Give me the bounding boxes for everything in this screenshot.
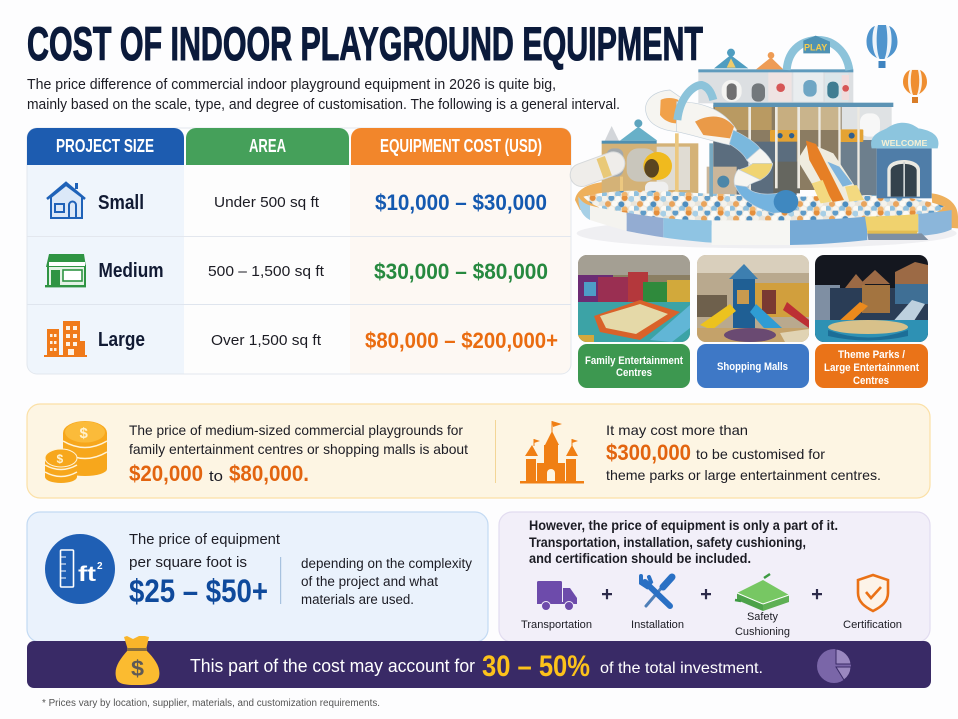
callout: custom price: to be customised for [696,446,825,462]
back rim [575,182,958,228]
text: price per square foot: $25 – $50+ [129,573,268,609]
intro text: mainly based on the scale, type, and degree of customisation. The following is a general interval. [27,97,620,113]
table header: area [186,128,349,165]
icon: shield [858,575,888,611]
intro text: The price difference of commercial indoor playground equipment in 2026 is quite big, [27,77,556,93]
callout: medium price: The price of medium-sized commercial playgrounds for [129,422,463,438]
upper deck [698,69,893,107]
text: banner: This part of the cost may account for [190,656,475,676]
callout: medium price [129,422,468,486]
text: additional costs: Transportation, installation, safety cushioning, [529,535,806,550]
illustration: playground [575,36,958,248]
row: small [47,183,547,218]
plus signs [602,589,822,599]
text: banner: of the total investment. [600,660,763,677]
ball pit [583,191,945,228]
row: small: Under 500 sq ft [214,194,320,211]
welcome house: WELCOME [881,138,928,148]
foam ring [578,197,952,245]
photo: shopping mall [697,255,809,342]
table header: equipment cost: EQUIPMENT COST (USD) [380,136,542,156]
icon: coins: $ [80,425,88,442]
icon: orange balloon [903,69,927,103]
callout: custom price: theme parks or large entertainment centres. [606,467,881,483]
row: large: Over 1,500 sq ft [211,332,322,349]
callout: medium price: to [209,469,223,485]
callout: medium price: $80,000. [229,461,309,486]
spiral slide [646,85,798,213]
panel: price table [27,128,571,374]
panel: price callouts [27,404,930,498]
row: medium: $30,000 – $80,000 [374,259,548,284]
PLAY arch: PLAY [804,42,828,52]
icon: pie chart [817,649,851,683]
icon labels: Safety [747,611,778,623]
row: small: $10,000 – $30,000 [375,190,547,215]
icon labels: Installation [631,619,684,631]
table header: equipment cost [351,128,571,165]
text: complexity note [301,556,472,607]
icon: safety cushion [735,574,789,611]
photo: family centre [578,255,690,342]
icon: coins [45,421,107,483]
text: price per square foot: The price of equipment [129,531,281,548]
banner: share of total investment [27,636,931,688]
icon labels: Transportation [521,619,592,631]
roof domes [714,49,783,69]
text: additional costs [529,518,838,566]
icon: money bag [116,636,159,685]
icon: money bag: $ [131,656,144,681]
footnote: * Prices vary by location, supplier, materials, and customization requirements. [42,698,380,709]
panel: theme parks [815,255,928,388]
callout: custom price: It may cost more than [606,422,748,438]
row: large: $80,000 – $200,000+ [365,328,558,353]
text: additional costs: and certification should be included. [529,551,751,566]
panel: family entertainment centres [578,255,690,388]
floor shadow [577,218,957,248]
yellow capsule [643,152,672,180]
row: medium [45,254,548,287]
label: family centres: Family Entertainment [585,355,683,367]
icon: ft squared: ft [78,563,96,586]
intro text [27,77,620,113]
table header: project size: PROJECT SIZE [56,136,154,156]
panel: price per square foot [27,512,488,642]
icon labels: Certification [843,619,902,631]
icon: castle [520,421,584,484]
row: large: Large [98,329,145,351]
label: theme parks: Theme Parks / [838,349,905,361]
left white tube [582,163,613,175]
text: complexity note: materials are used. [301,592,414,607]
PLAY arch [787,36,849,70]
text: banner: 30 – 50% [482,650,590,683]
icon: truck [537,581,577,610]
icon labels: Cushioning [735,626,790,638]
callout: custom price: $300,000 [606,440,691,465]
icon: buildings [44,321,87,357]
panel: additional costs [499,512,930,642]
lower structure [707,105,892,197]
panel: shopping malls [697,255,809,388]
table body [27,160,571,374]
row: medium: Medium [98,260,164,282]
label: shopping malls: Shopping Malls [717,361,788,373]
icon: coins: $ [56,452,64,466]
icon labels [521,611,902,638]
callout: medium price: $20,000 [129,461,203,486]
left small house [602,119,698,200]
label: family centres [578,344,690,388]
text: complexity note: of the project and what [301,574,438,589]
icon: house [47,183,85,218]
table header: project size [27,128,184,165]
icon: blue balloon [866,25,898,68]
row: medium: 500 – 1,500 sq ft [208,263,325,280]
welcome house [871,123,938,198]
icon: wrench and screwdriver [641,576,672,606]
label: theme parks [815,344,928,388]
icon: ft squared: 2 [97,561,103,572]
text: banner [190,650,763,683]
text: complexity note: depending on the complexity [301,556,472,571]
text: price per square foot [129,531,281,609]
text: additional costs: However, the price of equipment is only a part of it. [529,518,838,533]
photo: theme park [815,255,928,342]
row: large [44,321,558,357]
callout: medium price: family entertainment centres or shopping malls is about [129,441,468,457]
label: theme parks: Large Entertainment [824,362,919,374]
icon: ft squared [45,534,115,604]
label: theme parks: Centres [853,375,889,387]
text: price per square foot: per square foot is [129,554,247,571]
label: family centres: Centres [616,367,652,379]
callout: custom price [606,422,881,483]
icon: store [45,254,86,287]
row: small: Small [98,192,144,214]
straight slide [797,141,864,203]
table header: area: AREA [249,136,286,156]
